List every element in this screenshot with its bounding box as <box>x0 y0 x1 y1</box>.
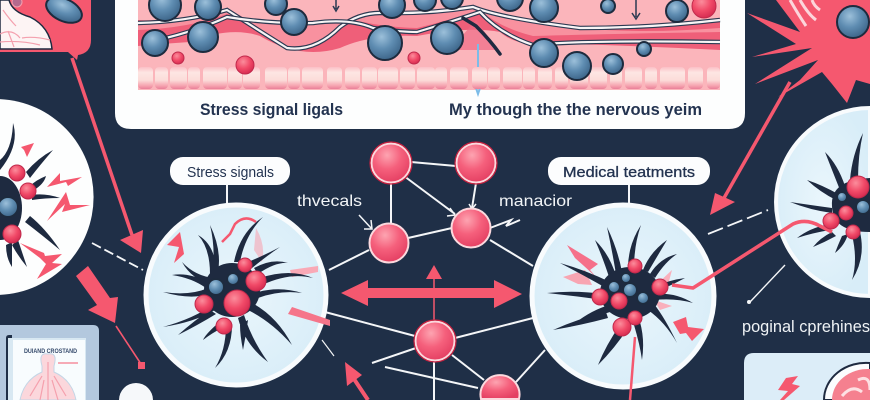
neuron <box>0 123 60 267</box>
panel: medical neuron circle <box>532 205 714 387</box>
red tissue bands <box>138 5 720 52</box>
panel: far-left neuron circle <box>0 99 94 295</box>
dashed connector: right <box>708 210 768 234</box>
caption: left: Stress signal ligals <box>200 100 343 119</box>
panel: bottom-left book card <box>0 325 99 400</box>
arrow: burst to medical circle <box>710 82 790 215</box>
arrow: bottom pink arrow <box>345 362 368 400</box>
arrow: thick pink arrow to card <box>76 266 145 369</box>
teeth row <box>138 67 720 89</box>
small dark arrows <box>333 0 640 19</box>
lightning bolts <box>20 143 90 279</box>
icon: bottom white blob <box>119 383 153 400</box>
label: stress signals pill: Stress signals <box>187 164 274 181</box>
label: stress signals pill <box>170 157 290 203</box>
pink signal line between medical and far-right circles <box>672 213 839 288</box>
dark fiber <box>463 18 500 54</box>
label: manacior: manacior <box>499 193 573 210</box>
dashed connector: left <box>92 243 143 270</box>
body figure <box>20 354 78 400</box>
neuron <box>790 133 870 280</box>
icon: brain <box>824 363 870 400</box>
pink hatch <box>458 20 498 50</box>
icon: top-right pink burst cell <box>747 0 870 103</box>
pink glow and lightning <box>167 218 330 326</box>
arrow: horizontal double-headed pink arrow <box>341 280 522 308</box>
blue arrow <box>474 44 482 94</box>
network connector lines <box>322 162 545 400</box>
lightning bolts <box>563 245 704 341</box>
panel: top-left anatomy callout <box>0 0 91 60</box>
panel: top cross-section <box>115 0 745 129</box>
arrow: callout to stress circle <box>72 58 143 253</box>
panel: stress neuron circle <box>146 205 330 385</box>
pink line below medical circle <box>630 337 635 400</box>
label: medical treatments pill <box>548 157 710 203</box>
small arrow to node <box>359 215 372 229</box>
label: thvecals: thvecals <box>297 193 362 210</box>
blue and red cells <box>142 0 716 80</box>
neuron <box>547 225 693 365</box>
label: medical treatments pill: Medical teatments <box>563 164 695 181</box>
neuron <box>163 217 313 368</box>
tissue background <box>138 0 720 90</box>
nerve fibers <box>138 7 720 49</box>
icon: lightning <box>778 376 800 400</box>
arrow: vertical pink arrow <box>426 265 442 320</box>
connector with dot <box>747 265 785 304</box>
caption: right: My though the the nervous yeim <box>449 100 702 119</box>
panel: far-right neuron circle <box>776 108 870 296</box>
panel: bottom-right brain card <box>744 353 870 400</box>
book title: DUIAND CROSTAND <box>24 349 78 355</box>
network nodes <box>370 142 520 399</box>
